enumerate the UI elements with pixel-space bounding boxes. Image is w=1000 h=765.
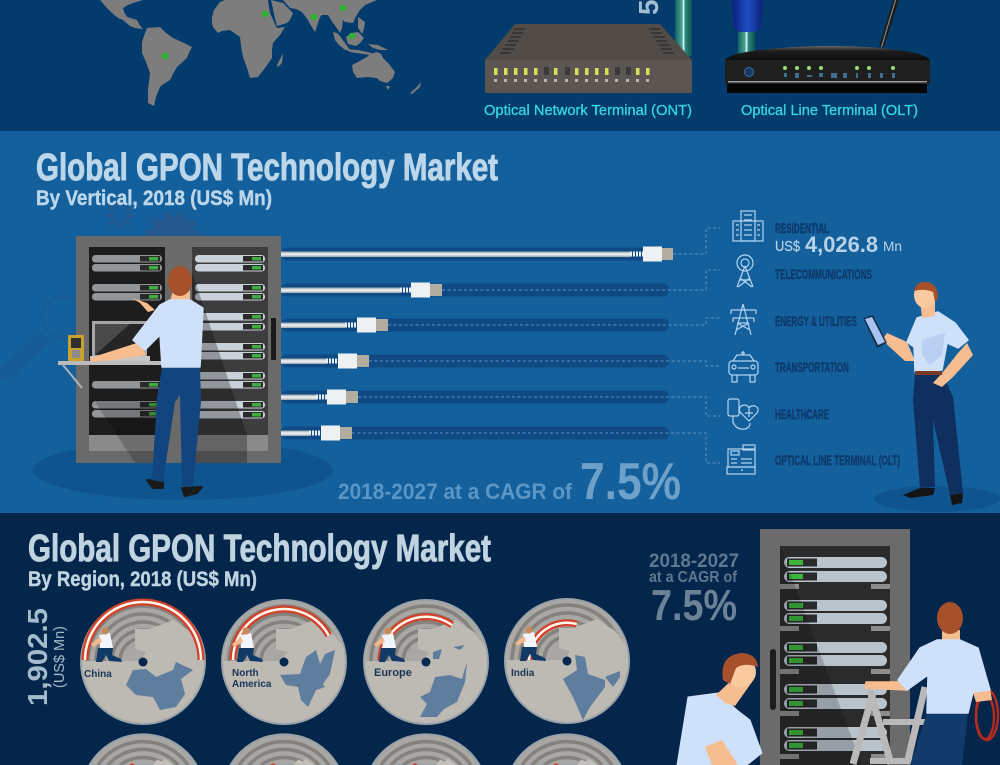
server rack: by region bbox=[760, 529, 910, 765]
technician seen from behind bbox=[90, 266, 203, 496]
icon: background gears bbox=[110, 204, 197, 264]
title: by vertical: Global GPON Technology Market bbox=[36, 147, 498, 189]
bar: energy and utilities bbox=[281, 318, 669, 332]
device label: ONT: Optical Network Terminal (ONT) bbox=[484, 103, 692, 119]
floor shadow under man with tablet bbox=[874, 486, 1000, 512]
device: optical line terminal bbox=[725, 0, 930, 93]
dial: India bbox=[505, 599, 629, 723]
category label: optical line terminal: OPTICAL LINE TERMINAL (OLT) bbox=[775, 452, 900, 468]
dial: China bbox=[81, 600, 205, 724]
title: by region: Global GPON Technology Market bbox=[28, 528, 491, 570]
CAGR callout: by vertical bbox=[338, 453, 681, 511]
ladder bbox=[853, 687, 932, 764]
section background: by region bbox=[0, 513, 1000, 765]
North America label: America bbox=[232, 679, 272, 690]
category label: residential with value: 4,026.8 bbox=[805, 232, 878, 257]
bar: residential bbox=[281, 246, 673, 262]
CAGR callout: by vertical: 2018-2027 at a CAGR of bbox=[338, 479, 573, 504]
value axis label bbox=[22, 608, 68, 706]
CAGR callout: by region: 7.5% bbox=[651, 581, 737, 630]
icon: car bbox=[729, 351, 758, 382]
value axis label: (US$ Mn) bbox=[51, 626, 68, 688]
dial: North America bbox=[222, 600, 346, 724]
bar chart: cable lengths by vertical bbox=[281, 246, 673, 440]
category label: residential with value: Mn bbox=[883, 238, 902, 254]
dial: Europe bbox=[364, 600, 488, 724]
value axis label: 1,902.5 bbox=[22, 608, 53, 706]
device: optical network terminal bbox=[485, 0, 692, 93]
North America label: North bbox=[232, 668, 259, 679]
China map bbox=[126, 662, 193, 710]
green location markers bbox=[162, 5, 355, 59]
device label: OLT: Optical Line Terminal (OLT) bbox=[741, 103, 918, 119]
technician on ladder with red cable bbox=[865, 602, 998, 765]
icon: telecom tower bbox=[737, 255, 753, 287]
icon: building bbox=[733, 211, 763, 241]
section background: devices and map bbox=[0, 0, 1000, 131]
CAGR callout: by vertical: 7.5% bbox=[580, 453, 681, 511]
North America gauge arc bbox=[233, 609, 329, 660]
India map bbox=[563, 655, 620, 720]
category label: residential with value: RESIDENTIAL bbox=[775, 220, 829, 236]
dials: second row bbox=[90, 734, 620, 765]
server rack with technician bbox=[58, 236, 281, 496]
desk with laptop and tester bbox=[58, 321, 162, 388]
subtitle: by vertical: By Vertical, 2018 (US$ Mn) bbox=[36, 187, 272, 210]
CAGR callout: by region: at a CAGR of bbox=[649, 569, 738, 586]
category label: transportation: TRANSPORTATION bbox=[775, 359, 849, 375]
category label: residential with value bbox=[775, 220, 902, 257]
Europe label: Europe bbox=[374, 667, 412, 679]
subtitle: by region: By Region, 2018 (US$ Mn) bbox=[28, 568, 257, 591]
China label: China bbox=[84, 669, 112, 680]
category label: healthcare: HEALTHCARE bbox=[775, 406, 829, 422]
bar: optical line terminal bbox=[281, 426, 669, 440]
Europe gauge arc bbox=[381, 617, 452, 660]
category label: residential with value: US$ bbox=[775, 238, 801, 255]
dashed leader lines to category icons bbox=[352, 228, 720, 463]
Europe map bbox=[420, 645, 467, 717]
CAGR callout: by region: 2018-2027 bbox=[649, 551, 739, 572]
section background: by vertical bbox=[0, 131, 1000, 513]
North America map bbox=[280, 650, 335, 707]
world map with green location markers bbox=[100, 0, 421, 106]
icon: healthcare bbox=[728, 399, 758, 429]
bar: healthcare bbox=[281, 390, 669, 404]
CAGR callout: by region bbox=[649, 551, 739, 630]
technician working at rack bottom bbox=[677, 653, 762, 765]
India gauge arc bbox=[529, 623, 577, 660]
floor shadow under rack bbox=[33, 440, 333, 500]
bar: transportation bbox=[281, 354, 669, 368]
bar: telecommunications bbox=[281, 282, 669, 298]
category label: telecommunications: TELECOMMUNICATIONS bbox=[775, 266, 872, 282]
icon: magnifying glass bbox=[7, 297, 82, 372]
China gauge arc bbox=[85, 602, 201, 660]
icon: power pylon bbox=[731, 304, 756, 335]
icon: cash register terminal bbox=[727, 445, 755, 474]
man holding tablet bbox=[863, 282, 973, 505]
India label: India bbox=[511, 668, 535, 679]
category label: energy and utilities: ENERGY & UTILITIES bbox=[775, 313, 857, 329]
